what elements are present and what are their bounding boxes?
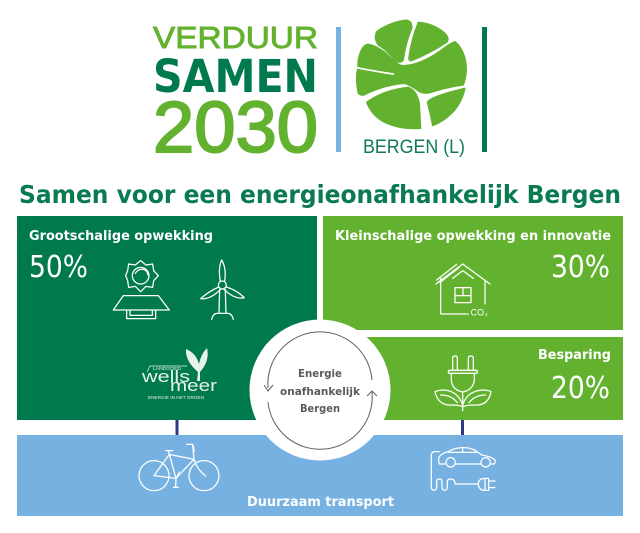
logo: Verduur Samen 2030: VERDUUR bbox=[153, 20, 318, 55]
heading: besparing: Besparing bbox=[538, 348, 611, 363]
icon: plug with leaves bbox=[435, 356, 491, 411]
value: 50%: 50% bbox=[29, 250, 88, 285]
logo: Verduur Samen 2030: 2030 bbox=[153, 88, 318, 168]
logo divider: green bar bbox=[482, 27, 487, 152]
logo: Landgoed Wellsmeer: LANDGOED bbox=[153, 366, 182, 371]
center circle background bbox=[250, 320, 390, 460]
icon: electric car with cable bbox=[431, 448, 495, 490]
panel: kleinschalige opwekking en innovatie bbox=[323, 216, 623, 330]
seed leaves bbox=[186, 348, 208, 381]
panel: besparing bbox=[323, 337, 623, 420]
icon: wind turbine bbox=[201, 260, 244, 319]
connector: left bbox=[176, 420, 178, 436]
cycle arrows bbox=[264, 332, 377, 449]
icon: house with CO2: CO bbox=[471, 307, 484, 317]
panel: duurzaam transport bbox=[17, 435, 623, 516]
logo divider: blue bar bbox=[336, 27, 341, 152]
logo: Landgoed Wellsmeer: ENERGIE IN HET GROEN bbox=[148, 395, 204, 400]
heading: kleinschalige opwekking en innovatie: Kleinschalige opwekking en innovatie bbox=[335, 229, 611, 244]
cycle label: Bergen bbox=[300, 402, 340, 415]
panel: grootschalige opwekking bbox=[17, 216, 317, 420]
logo: Landgoed Wellsmeer bbox=[141, 348, 217, 400]
cycle label bbox=[280, 367, 361, 415]
icon: house with CO2: 2 bbox=[485, 312, 488, 317]
logo: Verduur Samen 2030 bbox=[153, 20, 318, 168]
diagram: energy cycle bbox=[264, 332, 377, 449]
cycle label: Energie bbox=[298, 367, 342, 380]
value: 30%: 30% bbox=[551, 250, 610, 285]
logo: tree of Bergen bbox=[355, 20, 466, 129]
icon: house with CO2 bbox=[436, 264, 490, 317]
heading: duurzaam transport: Duurzaam transport bbox=[247, 495, 394, 510]
logo: Landgoed Wellsmeer: meer bbox=[170, 376, 217, 395]
value: 20%: 20% bbox=[551, 371, 610, 406]
logo: Landgoed Wellsmeer: wells bbox=[141, 367, 190, 386]
icon: solar panel bbox=[113, 261, 169, 319]
connector: right bbox=[461, 420, 464, 436]
logo: Verduur Samen 2030: SAMEN bbox=[153, 50, 318, 103]
heading: grootschalige opwekking: Grootschalige opwekking bbox=[29, 229, 213, 244]
cycle label: onafhankelijk bbox=[280, 385, 361, 398]
icon: bicycle bbox=[139, 444, 219, 491]
logo: Bergen (L): BERGEN (L) bbox=[363, 136, 465, 158]
